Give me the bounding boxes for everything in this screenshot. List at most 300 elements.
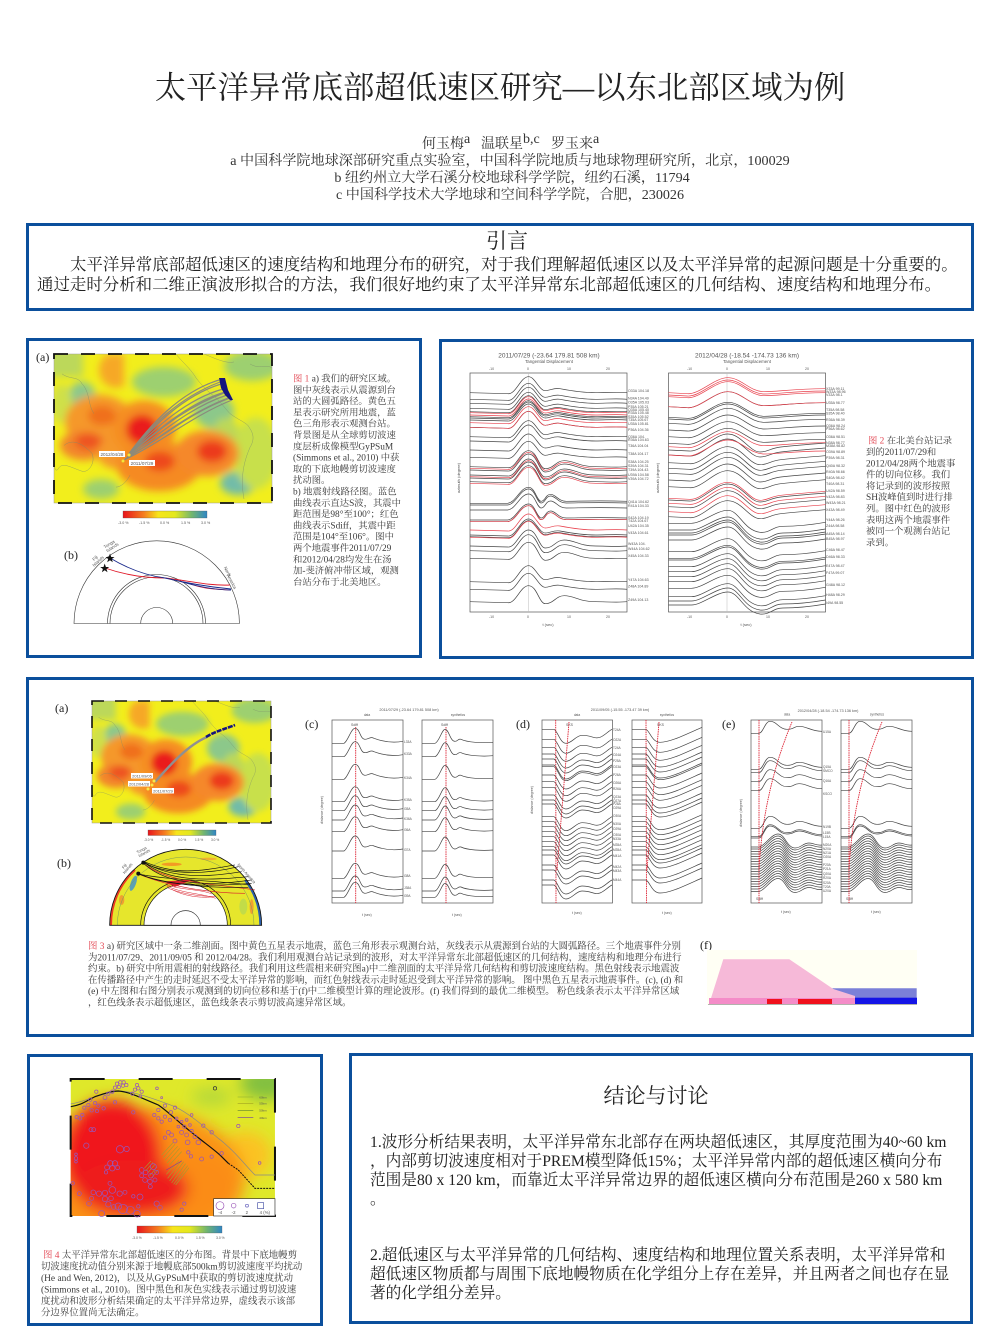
caption: figure 3: 在传播路径中产生的走时延迟不受太平洋异常的影响，而红色射线表示走时延迟受到太平洋异常的影响。 图中黑色五星表示地震事件。(c), (d) 和	[88, 974, 683, 986]
colour bar: 3.0 %	[216, 1236, 225, 1240]
authors: 温联星	[481, 136, 523, 152]
caption: figure 4: 切波速度扰动值分别来源于地幔底部500km剪切波速度平均扰动	[41, 1260, 303, 1272]
station labels: V33A 98.1	[826, 393, 843, 397]
station labels: T38A 104.17	[628, 452, 648, 456]
station labels: KSCO	[823, 792, 833, 796]
colour bar	[132, 1226, 225, 1240]
caption: figure 1: 图中灰线表示从震源到台	[293, 384, 396, 396]
waveform plot d: data	[574, 713, 580, 717]
station labels: M20A	[823, 843, 832, 847]
caption: figure 4: 度扰动和波形分析结果确定的太平洋异常边界，虚线表示该部	[41, 1295, 296, 1307]
caption: figure 1: 色三角形表示观测台站。	[293, 418, 396, 430]
waveform plot e: t (sec)	[871, 910, 881, 914]
station labels: Z44A 98.58	[826, 524, 844, 528]
waveform plot: 2011/07/29: 2011/07/29 (-23.64 179.81 508 km)	[498, 352, 600, 360]
blue ray	[110, 558, 231, 590]
station labels: L33A	[404, 740, 412, 744]
station labels: Q16A	[823, 779, 832, 783]
station labels: P39A 98.31	[826, 456, 845, 460]
station labels: R35A 105.48	[628, 411, 649, 415]
station labels: W43A 98.21	[826, 501, 846, 505]
station labels: Q41A 104.62	[628, 500, 649, 504]
waveform plot e: data	[784, 712, 790, 716]
waveform plot: 2012/04/28: -10	[687, 615, 692, 619]
icon: event stars	[146, 780, 156, 790]
station labels: E47A 98.47	[826, 564, 845, 568]
station labels: M44A	[613, 878, 622, 882]
waveform plot c: Sdiff	[351, 723, 358, 727]
waveform plot d	[530, 708, 702, 915]
waveform plot e	[739, 709, 912, 914]
black traces	[668, 392, 826, 614]
caption: figure 1: 曲线表示Sdiff，其震中距	[293, 519, 396, 531]
station labels: T36A 104.04	[628, 444, 648, 448]
caption: figure 1: 度层析成像模型GyPSuM	[293, 440, 394, 452]
station labels: I37A	[404, 848, 411, 852]
caption: figure 3: 约束。b) 研究中所用震相的射线路径。我们利用这些震相来研究图a)中二维剖面的太平洋异常几何结构和剪切波速度结构。黑色射线表示地震波	[88, 963, 680, 975]
station labels: Q27A	[613, 799, 622, 803]
depth legend: 50km	[259, 1109, 267, 1113]
waveform plot e: distance (degree)	[739, 799, 743, 827]
station labels: Q35A 105.40	[628, 408, 649, 412]
authors: 罗玉来	[551, 135, 593, 152]
caption: figure 1: b) 地震射线路径图。蓝色	[293, 486, 397, 498]
station labels: O23A	[613, 765, 622, 769]
location labels: North	[223, 566, 232, 578]
waveform plot: 2011/07/29: 0	[527, 615, 529, 619]
ULVZ circles	[71, 1081, 261, 1217]
tomography ray diagram	[109, 847, 262, 926]
waveform plot: 2012/04/28: -10	[687, 367, 692, 371]
station labels: T35A 105.67	[628, 418, 648, 422]
station labels: D46A 98.33	[826, 555, 845, 559]
station labels: U35A 98.77	[826, 401, 845, 405]
waveform plot: 2011/07/29: -10	[489, 615, 494, 619]
station labels: O35A 105.03	[628, 400, 649, 404]
station labels: O33A 104.18	[628, 389, 649, 393]
waveform plot: 2012/04/28: 2012/04/28 (-18.54 -174.73 136 km)	[695, 352, 799, 360]
event label 2: 2012/04/28	[129, 782, 150, 786]
waveform plot d: t (sec)	[572, 911, 582, 915]
station labels: O30A	[613, 814, 622, 818]
station labels: S38A 104.25	[628, 460, 649, 464]
waveform plot d: t (sec)	[662, 911, 672, 915]
station labels: O39A 98.89	[826, 450, 845, 454]
station labels: K34A	[404, 776, 413, 780]
panel: figure 3	[28, 678, 972, 1036]
station labels: P26A	[613, 773, 622, 777]
affiliation a: a 中国科学院地球深部研究重点实验室，中国科学院地质与地球物理研究所，北京，100029	[230, 152, 790, 169]
circle size legend	[214, 1199, 275, 1216]
waveform plot: 2012/04/28	[655, 352, 846, 627]
location labels: America	[226, 573, 238, 590]
black traces	[470, 377, 627, 604]
location labels: Islands	[91, 554, 106, 568]
caption: figure 1: 距范围是98°至100°；红色	[293, 508, 399, 520]
colour bar: 1.5 %	[196, 1236, 205, 1240]
caption: figure 4: 分边界位置尚无法确定。	[41, 1306, 144, 1318]
station labels: O30A	[613, 833, 622, 837]
label b: (b)	[64, 548, 78, 562]
colour bar: -3.0 %	[144, 838, 153, 842]
waveform plot: 2012/04/28: 10	[766, 367, 770, 371]
data traces	[542, 729, 612, 899]
synthetic traces	[841, 721, 912, 892]
station labels: T24A	[613, 728, 621, 732]
caption: figure 4: (Simmons et al., 2010)。图中黑色和灰色实线表示通过剪切波速	[41, 1284, 297, 1296]
location labels: Islands	[122, 862, 134, 875]
location labels: Islands	[105, 541, 120, 553]
station labels: U35A 105.81	[628, 422, 649, 426]
colour bar: 1.5 %	[181, 521, 191, 525]
base line	[110, 849, 262, 925]
waveform plot e: t (sec)	[781, 910, 791, 914]
caption: figure 2: 被同一个观测台站记	[866, 525, 950, 537]
colour bar: -3.0 %	[118, 521, 129, 525]
waveform plot: 2011/07/29: t (sec)	[542, 622, 554, 627]
conclusion 2: 2.超低速区与太平洋异常的几何结构、速度结构和地理位置关系表明，太平洋异常和	[370, 1245, 945, 1264]
waveform plot: 2011/07/29	[456, 352, 650, 627]
station labels: T35A 98.58	[826, 408, 844, 412]
depth legend	[238, 1095, 267, 1120]
location labels: North America	[236, 862, 257, 885]
station labels: V42A 98.83	[826, 495, 845, 499]
label a: (a)	[36, 350, 49, 364]
station labels: T20A	[823, 885, 831, 889]
waveform plot c	[320, 708, 493, 917]
map: study region	[49, 349, 280, 503]
caption: figure 3: 为2011/07/29、2011/09/05 和 2012/04/28。我们利用观测台站记录到的波形，对太平洋异常东北部超低速区的几何结构，速度结构和地理分布进行	[88, 951, 682, 963]
station labels: M38A 98.82	[826, 444, 845, 448]
hatched regions	[144, 1142, 189, 1185]
station labels: R26A	[613, 787, 622, 791]
caption: figure 1: a) 我们的研究区域。	[312, 372, 396, 384]
panel: figure 1	[28, 340, 420, 656]
location labels: Tonga	[103, 539, 116, 549]
black rays	[138, 862, 252, 887]
station labels: Q15A	[823, 765, 832, 769]
station labels: U20A	[823, 889, 832, 893]
colour bar: 0.0 %	[160, 521, 170, 525]
station labels: P35A 105.21	[628, 405, 649, 409]
introduction text: 太平洋异常底部超低速区的速度结构和地理分布的研究，对于我们理解超低速区以及太平洋异常的起源问题是十分重要的。	[70, 255, 958, 274]
depth legend: 40km	[259, 1116, 267, 1120]
red traces	[668, 378, 826, 514]
red travel time curves	[556, 720, 659, 903]
synthetic traces	[632, 727, 702, 893]
station labels: A45A 98.14	[826, 532, 845, 536]
authors: 何玉梅	[422, 135, 464, 152]
waveform plot: 2012/04/28: Tangential Displacement	[723, 359, 772, 364]
caption: figure 2: 到的2011/07/29和	[866, 446, 936, 458]
station labels: K33A	[404, 752, 413, 756]
station labels: N20A	[823, 847, 832, 851]
location labels: Islands	[137, 848, 151, 858]
caption: figure 2: 录到。	[866, 536, 894, 548]
station labels: O36A 98.51	[826, 435, 845, 439]
caption: figure 2: 表明这两个地震事件	[866, 514, 951, 526]
label f: (f)	[700, 938, 712, 952]
label c: (c)	[305, 717, 318, 731]
label d: (d)	[516, 717, 530, 731]
station labels: W44A 104.62	[628, 547, 650, 551]
caption: figure 4: 太平洋异常东北部超低速区的分布图。背景中下底地幔剪	[59, 1249, 297, 1261]
circle size legend: 2	[246, 1210, 249, 1215]
conclusion 2: 超低速区物质都与周围下底地幔物质在化学组分上存在差异，并且两者之间也存在显	[370, 1264, 950, 1283]
depth legend: 55km	[259, 1102, 267, 1106]
station labels: M42A	[613, 865, 622, 869]
station labels: Q20A	[823, 872, 832, 876]
station labels: K36A	[404, 817, 413, 821]
waveform plot: 2011/07/29: 20	[606, 615, 610, 619]
caption: figure 2: 列。图中红色的波形	[866, 502, 951, 514]
circle size legend: -4	[218, 1210, 223, 1215]
caption: figure 1: 站的大圆弧路径。黄色五	[293, 395, 396, 407]
waveform plot: 2012/04/28: 20	[805, 615, 809, 619]
colour bar	[144, 830, 219, 842]
great circle paths	[124, 380, 232, 460]
waveform plot: 2012/04/28: 0	[726, 367, 728, 371]
data traces	[332, 728, 403, 897]
event label 1: 2011/09/05	[132, 774, 153, 778]
waveform plot: 2011/07/29: -10	[489, 367, 494, 371]
caption: figure 2: 图 2	[868, 436, 885, 446]
station labels: U39A 104.58	[628, 473, 649, 477]
station labels: U42A 104.35	[628, 524, 649, 528]
waveform plot c: Sdiff	[441, 723, 448, 727]
station labels: L15B	[823, 831, 830, 835]
caption: figure 3: ，红色线条表示超低速区，蓝色线条表示剪切波高速异常区域。	[88, 996, 351, 1008]
waveform plot c: 2011/07/29 (-23.64 179.81 508 km)	[379, 708, 439, 712]
caption: figure 3: a) 研究区域中一条二维剖面。图中黄色五星表示地震，蓝色三角形表示观测台站，灰线表示从震源到台站的大圆弧路径。三个地震事件分别	[104, 940, 681, 952]
station labels: L15A	[823, 835, 831, 839]
station labels: V39A 104.72	[628, 477, 649, 481]
caption: figure 1: 曲线表示直达S波，其震中	[293, 497, 401, 509]
station labels: I49A 98.55	[826, 601, 843, 605]
affiliation c: c 中国科学技术大学地球和空间科学学院，合肥，230026	[336, 186, 684, 203]
red traces	[470, 397, 627, 538]
station labels: SMCO	[823, 769, 833, 773]
waveform plot e: 2012/04/28 (-18.54 -174.73 136 km)	[798, 709, 859, 713]
basal anomaly layer	[709, 998, 855, 1004]
caption: figure 1: 星表示研究所用地震，蓝	[293, 406, 396, 418]
waveform plot c: synthetics	[451, 713, 465, 717]
best fit 2D model	[707, 950, 917, 1005]
caption: figure 1: 加-斐济俯冲带区域，观测	[293, 565, 399, 577]
map: ULVZ distribution	[70, 1078, 276, 1218]
station labels: Q40A 98.32	[826, 464, 845, 468]
caption: figure 4: (He and Wen, 2012)，以及从GyPSuM中获取的剪切波速度扰动	[41, 1272, 294, 1284]
conclusion 1: 1.波形分析结果表明，太平洋异常东北部存在两块超低速区，其厚度范围为40~60 km	[370, 1132, 946, 1151]
station labels: T24A	[613, 746, 621, 750]
station labels: O29A	[613, 806, 622, 810]
waveform plot d: 2011/09/05 (-15.55 -173.47 39 km)	[591, 708, 650, 712]
station labels: O20A	[823, 855, 832, 859]
waveform plot: 2012/04/28: t (sec)	[740, 622, 752, 627]
circle size legend: -2	[232, 1210, 236, 1215]
station labels: H48A 98.29	[826, 593, 845, 597]
caption: figure 2: 将记录到的波形按照	[866, 480, 951, 492]
station labels: P25A	[613, 759, 622, 763]
waveform plot: 2011/07/29: 10	[567, 615, 571, 619]
caption: figure 2: 件的切向位移。我们	[866, 469, 950, 481]
station labels: N38A 98.77	[826, 441, 845, 445]
station labels: M41A	[613, 854, 622, 858]
station labels: P21A	[823, 867, 832, 871]
conclusion 1: 。	[370, 1191, 386, 1208]
station labels: M35A	[613, 848, 622, 852]
colour bar: -1.5 %	[139, 521, 150, 525]
large low shear velocity province	[709, 959, 855, 1004]
station labels: M35A	[613, 843, 622, 847]
station labels: Q23A	[613, 795, 622, 799]
caption: figure 1: 图 1	[293, 374, 312, 384]
heading: conclusions: 结论与讨论	[604, 1084, 708, 1108]
station labels: O24A	[613, 753, 622, 757]
waveform plot: 2011/07/29: 10	[567, 367, 571, 371]
station labels: T40A 98.31	[826, 482, 844, 486]
caption: figure 1: 两个地震事件2011/07/29	[293, 542, 392, 554]
panel: conclusions	[350, 1054, 972, 1322]
station labels: Y47A 104.63	[628, 578, 649, 582]
station labels: S39A 104.31	[628, 464, 649, 468]
waveform plot c: data	[364, 713, 370, 717]
authors and affiliations	[230, 132, 790, 203]
waveform plot e: Sdiff	[846, 897, 853, 901]
anomaly boundary lines	[71, 1091, 275, 1188]
conclusion 2: 著的化学组分差异。	[370, 1284, 511, 1302]
authors: a	[464, 132, 471, 147]
event label 3: 2011/07/29	[153, 788, 174, 794]
colour bar: 0.0 %	[178, 838, 186, 842]
data traces	[751, 721, 822, 892]
authors: a	[593, 132, 600, 147]
station labels: M43A	[613, 869, 622, 873]
station labels: Q36A 98.24	[826, 424, 845, 428]
icon: stars	[136, 861, 145, 876]
high velocity anomaly	[832, 988, 917, 1004]
waveform plot d: distance (degree)	[530, 786, 534, 814]
waveform plot: 2012/04/28: azimuth (degree)	[655, 462, 660, 493]
station labels: R20A	[823, 876, 832, 880]
station labels: S35A 105.52	[628, 415, 649, 419]
station labels: U42A 98.59	[826, 489, 845, 493]
authors: b,c	[523, 132, 540, 147]
station labels: X33A 99.11	[826, 387, 844, 391]
panel: figure 2	[440, 340, 972, 658]
location labels: Fiji	[121, 862, 128, 870]
caption: figure 4: 图 4	[43, 1250, 60, 1261]
waveform plot: 2012/04/28: 20	[805, 367, 809, 371]
icon: stations	[219, 378, 233, 400]
caption: figure 1: 取的下底地幔剪切波速度	[293, 463, 396, 475]
colour bar: 0.0 %	[175, 1236, 184, 1240]
red travel time curves	[759, 720, 882, 903]
waveform plot: 2011/07/29: azimuth (degree)	[456, 462, 461, 493]
red ray	[105, 568, 230, 590]
waveform plot: 2012/04/28: 0	[726, 615, 728, 619]
station labels: Z49A 104.13	[628, 598, 648, 602]
conclusion 1: 范围是80 x 120 km，而靠近太平洋异常边界的超低速区横向分布范围是260 x 580 km	[370, 1170, 942, 1189]
caption: figure 2: 在北美台站记录	[884, 434, 952, 446]
location labels: Fiji	[91, 554, 99, 562]
station labels: C46A 98.47	[826, 548, 845, 552]
caption: figure 1: 背景图是从全球剪切波速	[293, 429, 396, 441]
caption: figure 1: 扰动图。	[293, 474, 330, 486]
station labels: Y44A 98.26	[826, 518, 845, 522]
station labels: R41A 104.33	[628, 504, 649, 508]
station labels: I39A	[404, 894, 411, 898]
waveform plot c: distance (degree)	[320, 796, 324, 824]
station labels: I38A	[404, 874, 411, 878]
caption: figure 3: 图 3	[88, 941, 105, 952]
station labels: V43A 104.61	[628, 531, 649, 535]
map: 2D profile	[88, 697, 278, 823]
ultra low velocity zone 1	[767, 999, 782, 1004]
label a: (a)	[55, 701, 68, 715]
station labels: P20A	[823, 863, 832, 867]
great circle path	[155, 737, 207, 782]
location labels	[119, 844, 257, 885]
heading: introduction: 引言	[486, 229, 528, 253]
station labels: X45A 104.33	[628, 554, 649, 558]
station labels: N33A	[613, 837, 622, 841]
caption: figure 3: (e) 中左图和右图分别表示观测到的切向位移和基于(f)中二维模型计算的理论波形。(f) 我们得到的最优二维模型。 粉色线条表示太平洋异常区域	[88, 985, 680, 997]
waveform plot c: t (sec)	[362, 913, 372, 917]
station labels: T42A 104.67	[628, 519, 648, 523]
waveform plot: 2011/07/29: 20	[606, 367, 610, 371]
colour bar: 1.5 %	[195, 838, 203, 842]
event label 1: 2012/04/28	[100, 452, 124, 457]
waveform plot: 2012/04/28: 10	[766, 615, 770, 619]
ray path diagram	[74, 537, 239, 624]
station labels: T39A 104.43	[628, 468, 648, 472]
waveform plot e: synthetics	[870, 712, 884, 716]
station labels: U15A	[823, 730, 832, 734]
ultra low velocity zone 2	[798, 999, 832, 1004]
station labels: P36A 104.36	[628, 428, 649, 432]
station labels: B45A 98.97	[826, 537, 845, 541]
icon: earthquake stars	[121, 453, 131, 463]
station labels: S40A 98.42	[826, 476, 845, 480]
station labels: Q36A 104.	[628, 435, 645, 439]
depth legend: 60km	[259, 1095, 267, 1099]
colour bar: 3.0 %	[201, 521, 211, 525]
waveform plot d: SKS	[566, 723, 574, 727]
waveform plot d: SKS	[657, 723, 665, 727]
station labels: Z48A 104.89	[628, 584, 648, 588]
station labels: N19B	[823, 825, 831, 829]
station labels: J38A	[404, 886, 412, 890]
station labels: K35A	[404, 798, 413, 802]
station labels: P36A 98.62	[826, 427, 845, 431]
station labels: S20A	[823, 881, 832, 885]
basal high velocity layer	[855, 998, 917, 1004]
station labels: O29A	[613, 827, 622, 831]
waveform plot d: synthetics	[660, 713, 674, 717]
waveform plot e: Sdiff	[756, 897, 763, 901]
station labels: R40A 98.66	[826, 470, 845, 474]
station labels: W43A 104.	[628, 542, 646, 546]
caption: figure 2: SH波峰值到时进行排	[866, 491, 953, 503]
red rays	[138, 863, 255, 898]
station labels: N30A	[613, 822, 622, 826]
station labels: S35A 98.40	[826, 412, 845, 416]
label b: (b)	[57, 856, 71, 870]
colour bar: -1.5 %	[161, 838, 170, 842]
waveform plot: 2011/07/29: Tangential Displacement	[525, 359, 574, 364]
colour bar: -3.0 %	[132, 1236, 142, 1240]
